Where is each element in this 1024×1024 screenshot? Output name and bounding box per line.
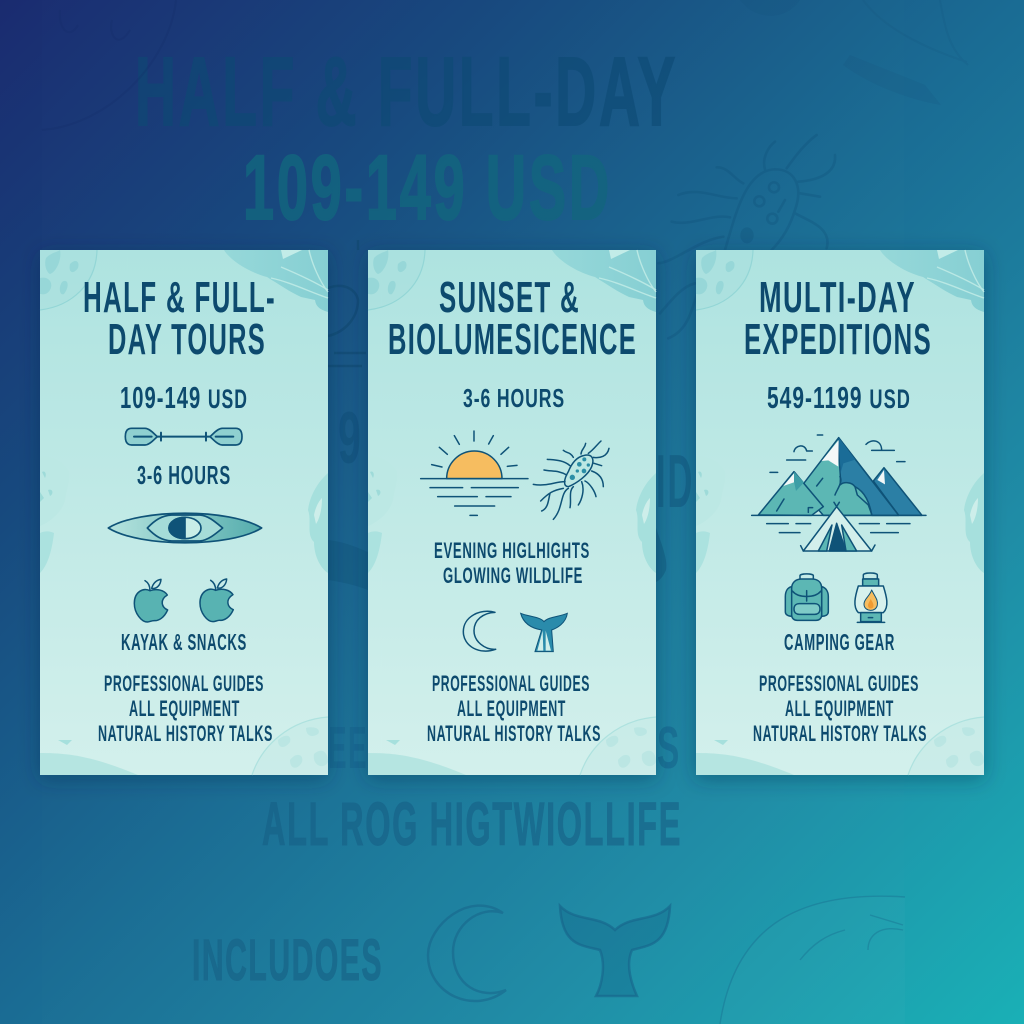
ghost dark shape in right gutter [656,528,666,582]
ghost bacterium [658,135,835,338]
ghost includes label: INCLUDOES [192,928,383,993]
heading [744,273,932,364]
price: 549-1199 USD [767,380,911,415]
ghost mug in gutter [328,240,366,366]
heading [388,273,637,364]
heading: HALF & FULL- [83,273,276,322]
includes list: ALL EQUIPMENT [785,696,894,721]
panel: sunset and bioluminescence [368,250,656,775]
icon: apples [134,579,233,622]
ghost moon [428,906,506,1001]
heading: BIOLUMESICENCE [388,315,637,364]
panel: multi-day expeditions [696,250,984,775]
ghost top-right shapes [740,0,941,105]
ghost fragments between cards: S [657,715,681,781]
ghost fragments between cards: EE [328,715,368,781]
ghost price: 109-149 USD [243,137,612,239]
includes list: NATURAL HISTORY TALKS [98,721,273,746]
ghost globe outline [720,896,905,1024]
highlights [434,538,590,588]
includes list: ALL EQUIPMENT [129,696,240,721]
includes list: PROFESSIONAL GUIDES [432,671,590,696]
ghost fragments between cards [328,398,694,781]
includes list: PROFESSIONAL GUIDES [104,671,264,696]
icon: whale tail [521,613,567,652]
panel: half and full-day tours [40,250,328,775]
ghost fragments between cards: 9 [338,398,363,479]
icon: paddle [125,428,242,445]
ghost background layer: ID [656,439,694,523]
duration: 3-6 HOURS [137,460,231,490]
duration: 3-6 HOURS [463,383,565,413]
ghost whale tail [560,906,670,996]
gear label: CAMPING GEAR [784,629,895,655]
includes list [753,671,927,746]
ghost globe lower right [720,896,905,1024]
includes list [98,671,273,746]
heading: SUNSET & [439,273,580,322]
heading [83,273,276,364]
ghost top-left moon [42,0,176,130]
includes list: ALL EQUIPMENT [457,696,566,721]
heading: MULTI-DAY [759,273,916,322]
icon: lantern [855,573,887,622]
highlights: EVENING HIGLHIGHTS [434,538,590,563]
icon: sunset [421,431,528,515]
price: 109-149 USD [120,380,248,415]
icon: mountains and tent [752,435,926,551]
ghost top-right lines [863,0,968,65]
highlights: GLOWING WILDLIFE [443,563,583,588]
ghost kayak band in gutter [328,540,368,590]
includes list: NATURAL HISTORY TALKS [427,721,601,746]
includes list [427,671,601,746]
icon: backpack [785,574,828,620]
icon: kayak [108,513,262,543]
heading: DAY TOURS [108,315,266,364]
gear label: KAYAK & SNACKS [121,629,247,655]
icon: glowing plankton [533,441,609,519]
icon: moon [463,611,496,651]
